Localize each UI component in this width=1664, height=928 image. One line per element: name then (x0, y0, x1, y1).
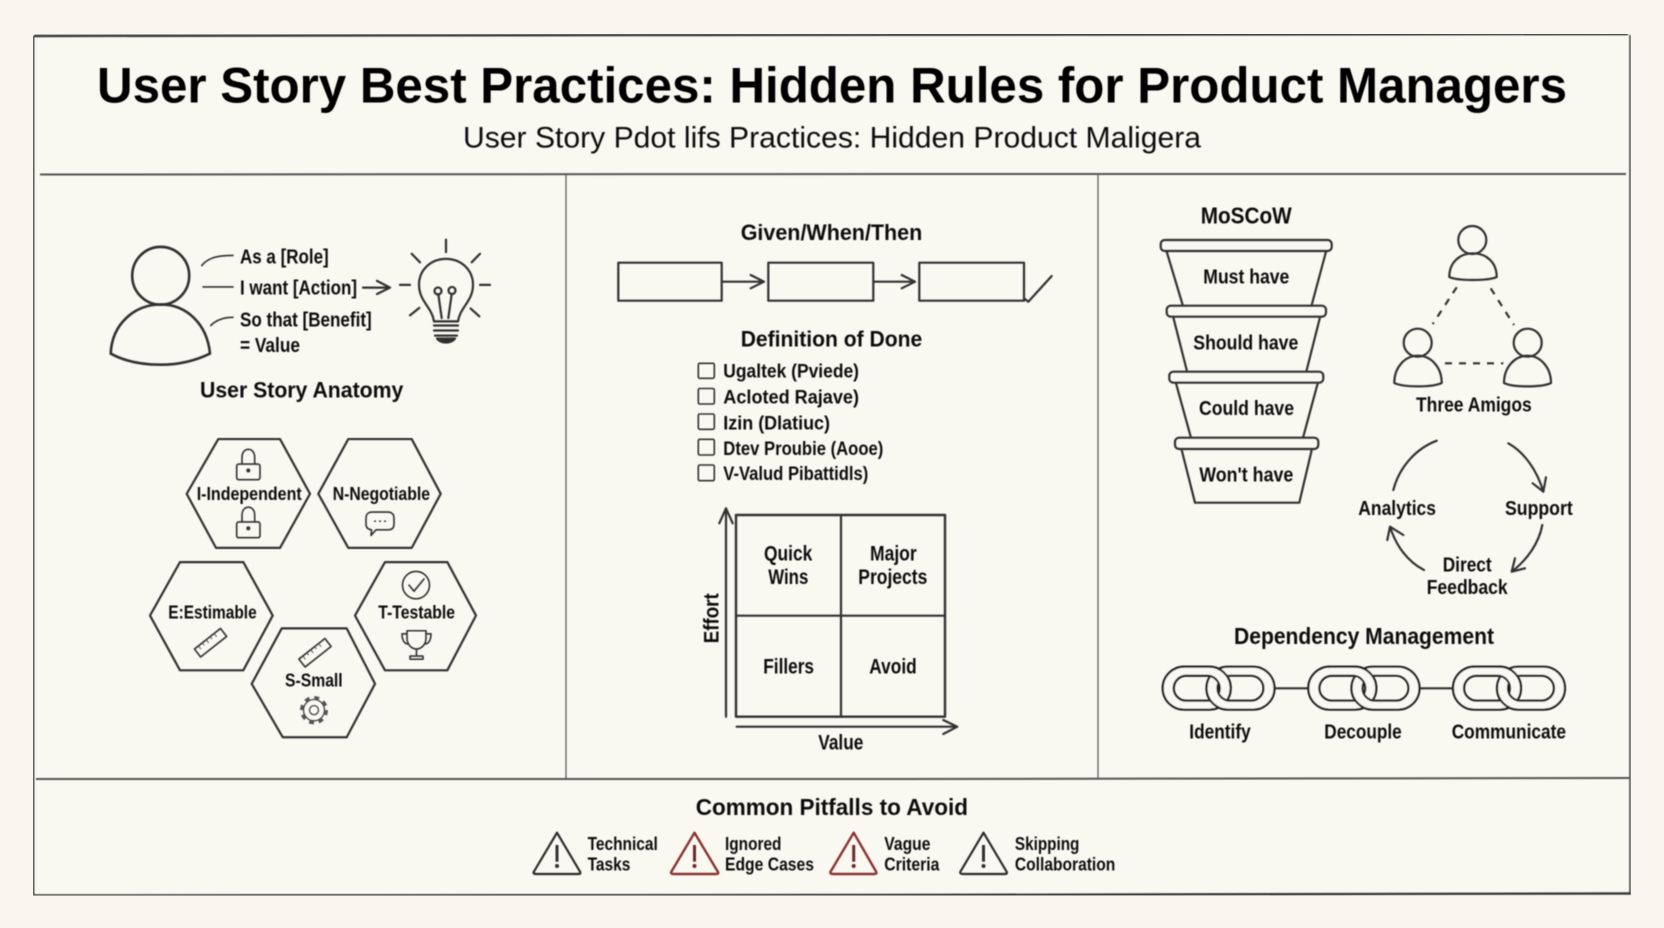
hexagon: small (252, 628, 375, 737)
hexagon: testable (355, 562, 476, 670)
axis label: value: Value (818, 731, 863, 754)
feedback cycle: Analytics (1358, 498, 1436, 520)
three amigos diagram: Three Amigos (1416, 395, 1532, 417)
quadrant labels: Wins (768, 566, 808, 589)
x axis arrow (737, 720, 957, 734)
story template text (240, 246, 372, 357)
hexagon: negotiable (318, 439, 441, 548)
hexagon: small: S-Small (285, 670, 343, 691)
story connector lines (202, 255, 233, 325)
pitfall: ignored edge cases (671, 833, 814, 875)
y axis arrow (719, 508, 733, 717)
story template text: As a [Role] (240, 246, 329, 268)
pitfall: vague criteria (830, 833, 940, 875)
pitfall: skipping collaboration: Skipping (1015, 834, 1079, 854)
feedback cycle: Direct (1443, 555, 1492, 577)
chain links (1163, 667, 1565, 710)
icon: user (111, 247, 210, 365)
moscow stacked buckets: Must have (1203, 266, 1289, 288)
heading: given when then: Given/When/Then (741, 220, 922, 245)
story template text: So that [Benefit] (240, 309, 372, 332)
chain labels: Communicate (1452, 721, 1566, 743)
pitfall: ignored edge cases: Edge Cases (725, 855, 814, 875)
panel: user story anatomy and INVEST (34, 175, 566, 778)
pitfall: technical tasks: Tasks (588, 855, 630, 875)
axis label: effort: Effort (700, 593, 723, 643)
moscow stacked buckets: Won't have (1199, 465, 1293, 487)
chain labels: Decouple (1324, 721, 1402, 743)
hexagon: estimable (150, 562, 273, 670)
quadrant labels: Major (870, 543, 917, 566)
hexagon: estimable: E:Estimable (168, 602, 257, 623)
checklist: V-Valud Pibattidls) (723, 464, 868, 485)
quadrant labels: Quick (764, 543, 813, 566)
feedback cycle (1358, 441, 1573, 599)
panel: prioritisation and collaboration (1158, 206, 1574, 744)
chain labels: Identify (1189, 721, 1251, 743)
heading: user story anatomy: User Story Anatomy (200, 377, 404, 403)
three amigos diagram (1394, 226, 1551, 417)
moscow stacked buckets (1161, 240, 1332, 503)
panel: common pitfalls (34, 779, 1630, 893)
pitfall: technical tasks (534, 833, 658, 875)
pitfall: vague criteria: Vague (884, 834, 930, 854)
quadrant labels: Projects (858, 566, 927, 589)
subtitle: User Story Pdot lifs Practices: Hidden Product Maligera (463, 122, 1201, 154)
hexagon: testable: T-Testable (378, 602, 455, 623)
heading: dependency management: Dependency Management (1234, 623, 1494, 649)
moscow stacked buckets: Could have (1199, 398, 1294, 420)
checklist: Acloted Rajave) (723, 387, 859, 408)
hexagon: independent (187, 439, 310, 548)
hexagon: negotiable: N-Negotiable (333, 484, 430, 504)
pitfall: skipping collaboration: Collaboration (1015, 855, 1115, 875)
story template text: I want [Action] (240, 277, 357, 299)
story template text: = Value (240, 335, 300, 357)
quadrant labels (763, 543, 927, 678)
feedback cycle: Feedback (1427, 577, 1508, 599)
quadrant labels: Avoid (869, 655, 917, 678)
pitfall: technical tasks: Technical (588, 834, 658, 854)
title: User Story Best Practices: Hidden Rules for Product Managers (97, 58, 1567, 114)
checklist: Dtev Proubie (Aooe) (723, 439, 883, 460)
panel: acceptance and prioritisation (566, 175, 1098, 778)
pitfall: vague criteria: Criteria (884, 855, 940, 875)
heading: common pitfalls: Common Pitfalls to Avoid (696, 794, 968, 820)
chart: value effort matrix (700, 508, 957, 754)
pitfall: ignored edge cases: Ignored (725, 834, 781, 854)
pitfall: skipping collaboration (960, 833, 1115, 875)
checklist: Izin (Dlatiuc) (723, 413, 830, 434)
feedback cycle: Support (1505, 498, 1573, 520)
heading: moscow: MoSCoW (1201, 202, 1292, 228)
moscow stacked buckets: Should have (1193, 332, 1298, 354)
chain labels (1189, 721, 1566, 743)
arrow to lightbulb (363, 281, 390, 294)
heading: definition of done: Definition of Done (741, 327, 922, 352)
quadrant labels: Fillers (763, 655, 814, 678)
checklist: Ugaltek (Pviede) (723, 361, 859, 382)
flow: given when then boxes (618, 263, 1052, 302)
checklist (698, 361, 883, 485)
hexagon: independent: I-Independent (197, 484, 302, 504)
header (97, 58, 1567, 154)
icon: lightbulb (400, 240, 490, 342)
